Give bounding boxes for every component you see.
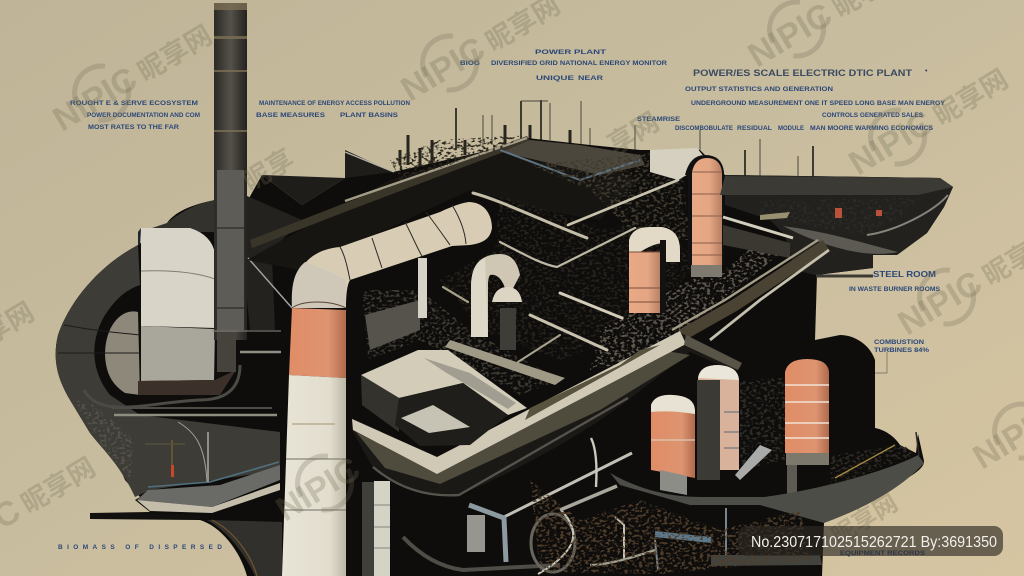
- rear pale tank: [697, 365, 739, 480]
- caption: top right heading and lines: UNDERGROUND MEASUREMENT ONE IT SPEED LONG BASE MAN ENERGY: [691, 100, 946, 107]
- scale bar: [90, 508, 200, 519]
- caption: upper centre left: PLANT BASINS: [340, 112, 399, 119]
- caption: right side: IN WASTE BURNER ROOMS: [849, 286, 941, 293]
- top roof strip and upper decks: [247, 135, 645, 270]
- lower left chamber: [137, 422, 282, 576]
- skyline of masts: [400, 100, 813, 190]
- caption: top right heading and lines: DISCOMBOBULATE: [675, 125, 734, 132]
- dark block around tanks: [740, 378, 785, 470]
- caption: upper centre left: [256, 100, 410, 119]
- caption: top right heading and lines: OUTPUT STATISTICS AND GENERATION: [685, 86, 833, 93]
- right orange tank: [785, 359, 829, 500]
- lower pipework: [403, 438, 810, 574]
- caption: top centre: BIOG: [460, 60, 480, 67]
- watermark 6: NIPIC: [270, 450, 367, 529]
- caption: top right heading and lines: CONTROLS GENERATED SALES: [822, 112, 924, 119]
- plant silhouette: [56, 138, 953, 576]
- caption: right side: TURBINES 84%: [874, 348, 930, 354]
- id badge: No.230717102515262721 By:3691350: [751, 534, 997, 551]
- caption: top right heading and lines: MAN MOORE WARMING ECONOMICS: [810, 125, 934, 132]
- caption: top centre: [460, 49, 667, 82]
- caption: top right heading and lines: •: [925, 68, 928, 75]
- watermark 10: 昵享: [238, 144, 299, 197]
- caption: right side: STEEL ROOM: [873, 270, 936, 279]
- lower right hull: [610, 432, 924, 566]
- white house on roof: [650, 148, 705, 180]
- caption: top left: [70, 100, 200, 131]
- caption: top left: MOST RATES TO THE FAR: [88, 124, 179, 131]
- watermark 11: 享网: [603, 107, 664, 160]
- caption: upper centre left: BASE MEASURES: [256, 112, 326, 119]
- caption: top left: POWER DOCUMENTATION AND COM: [87, 112, 200, 119]
- caption: bottom right under badge: EQUIPMENT RECORDS: [840, 550, 926, 557]
- tall peach pipe top right: [685, 155, 724, 277]
- caption: top centre: UNIQUE: [536, 75, 575, 82]
- white column bottom: [362, 481, 390, 576]
- caption: top right heading and lines: [637, 68, 946, 132]
- left bulge ring: [56, 245, 280, 497]
- front orange tank: [651, 395, 695, 495]
- caption: top centre: NEAR: [578, 75, 603, 82]
- id badge: [738, 526, 1003, 556]
- caption: top right heading and lines: MODULE: [778, 125, 805, 132]
- caption: right side: [849, 270, 941, 373]
- watermark 12: 昵享网: [827, 490, 903, 550]
- orange band: [289, 308, 346, 378]
- upper right walkway: [672, 217, 829, 340]
- interior machinery: [362, 150, 790, 395]
- caption: top centre: POWER PLANT: [535, 49, 606, 56]
- tall chimney: [214, 3, 247, 372]
- cream platform: [361, 340, 660, 446]
- caption: top right heading and lines: POWER/ES SCALE ELECTRIC DTIC PLANT: [693, 68, 912, 79]
- watermark 1: NIPIC昵享网: [47, 15, 218, 139]
- grey shoulder frames around chimney: [112, 196, 302, 415]
- main deck white walkway: [352, 331, 742, 496]
- peach arch pipe centre: [629, 227, 680, 313]
- white lower section: [282, 375, 346, 576]
- caption: upper centre left: MAINTENANCE OF ENERGY ACCESS POLLUTION: [259, 100, 410, 107]
- caption: right side: COMBUSTION: [874, 340, 924, 346]
- small white arch pipe: [471, 254, 522, 350]
- right wing hull: [720, 175, 953, 276]
- caption: bottom left: BIOMASS OF DISPERSED: [58, 544, 222, 551]
- watermark 4: NIPIC昵享网: [843, 59, 1014, 183]
- left upper shoulder: [140, 200, 215, 232]
- main elbow pipe: [282, 202, 492, 576]
- light girders: [418, 180, 678, 362]
- white storage tank: [138, 228, 236, 395]
- caption: top right heading and lines: RESIDUAL: [737, 125, 772, 132]
- caption: top left: ROUGHT E & SERVE ECOSYSTEM: [70, 100, 198, 107]
- caption: top right heading and lines: STEAMRISE: [637, 116, 681, 123]
- caption: top centre: DIVERSIFIED GRID NATIONAL ENERGY MONITOR: [491, 60, 667, 67]
